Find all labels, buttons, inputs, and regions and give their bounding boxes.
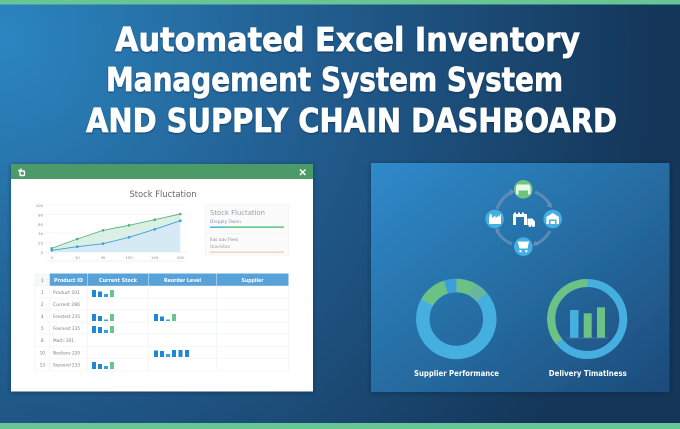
label: delivery timeliness: Delivery Timatlness bbox=[549, 369, 627, 378]
table header: Supplier bbox=[242, 278, 264, 284]
in-cell bars bbox=[92, 290, 189, 369]
legend card: Stock Fluctation bbox=[210, 209, 265, 217]
line chart: 20 bbox=[38, 240, 44, 246]
top accent bar bbox=[0, 0, 680, 4]
line chart: 0 bbox=[50, 255, 53, 260]
data table: Current 286 bbox=[53, 302, 80, 308]
donut: supplier performance bbox=[423, 285, 490, 352]
legend card: Ilas oav Fees bbox=[210, 237, 238, 242]
data table: Fenstect 235 bbox=[53, 314, 80, 320]
line chart: 200 bbox=[177, 255, 185, 260]
table header: Product ID bbox=[54, 278, 83, 284]
chart title: Stock Fluctation bbox=[130, 190, 196, 200]
window title bar bbox=[11, 164, 313, 179]
label: supplier performance: Supplier Performance bbox=[414, 369, 499, 378]
icon: factory node bbox=[485, 210, 504, 228]
icon: delivery store node bbox=[514, 180, 533, 199]
line chart bbox=[36, 203, 187, 261]
line chart: 150 bbox=[125, 255, 133, 260]
line chart: 30 bbox=[38, 231, 44, 236]
cycle arrowheads bbox=[495, 189, 552, 246]
cycle arrows bbox=[497, 192, 550, 244]
legend card bbox=[206, 205, 288, 255]
data table: 13 bbox=[40, 362, 45, 368]
bar chart bbox=[566, 307, 608, 338]
icon: cart node bbox=[514, 237, 533, 256]
icon: warehouse node bbox=[543, 210, 562, 228]
line chart: 100 bbox=[151, 255, 159, 260]
data table: Mad:i 301 bbox=[53, 338, 74, 344]
panel: spreadsheet window bbox=[11, 164, 313, 392]
table header: Current Stock bbox=[99, 278, 138, 284]
legend card: Uiavistas bbox=[210, 244, 230, 249]
title: Automated Excel Inventory bbox=[115, 20, 580, 59]
data table bbox=[35, 274, 288, 371]
line chart: 0 bbox=[41, 250, 44, 255]
bottom accent bar bbox=[0, 423, 680, 429]
panel: supply chain bbox=[371, 163, 670, 392]
legend card: Dropply Ownn bbox=[210, 219, 241, 225]
data table: Product 101 bbox=[53, 290, 80, 296]
title bbox=[86, 20, 617, 140]
title: Management System System bbox=[106, 60, 563, 99]
line chart: 10 bbox=[75, 255, 80, 260]
line chart: 30 bbox=[101, 255, 106, 260]
line chart: 60 bbox=[38, 222, 44, 227]
line chart: 100 bbox=[36, 203, 44, 208]
data table: 10 bbox=[40, 350, 45, 356]
donut: delivery timeliness bbox=[551, 283, 623, 355]
data table: Feomest 235 bbox=[53, 326, 80, 332]
icon: back arrow bbox=[18, 168, 24, 176]
data table: Nocliens 220 bbox=[53, 350, 80, 356]
title: AND SUPPLY CHAIN DASHBOARD bbox=[86, 101, 617, 140]
table header bbox=[41, 274, 288, 286]
data table: 5 bbox=[41, 326, 44, 332]
data table: Sozoend 233 bbox=[53, 362, 80, 368]
data table: 8 bbox=[41, 338, 44, 344]
data table: 1 bbox=[41, 290, 44, 296]
data table: 2 bbox=[41, 302, 44, 308]
line chart: 80 bbox=[38, 212, 44, 218]
data table: 4 bbox=[41, 314, 44, 320]
icon: close bbox=[300, 170, 306, 175]
table header: 1 bbox=[41, 278, 44, 284]
icon: warehouse with truck bbox=[513, 212, 535, 227]
table header: Reorder Level bbox=[164, 278, 201, 284]
